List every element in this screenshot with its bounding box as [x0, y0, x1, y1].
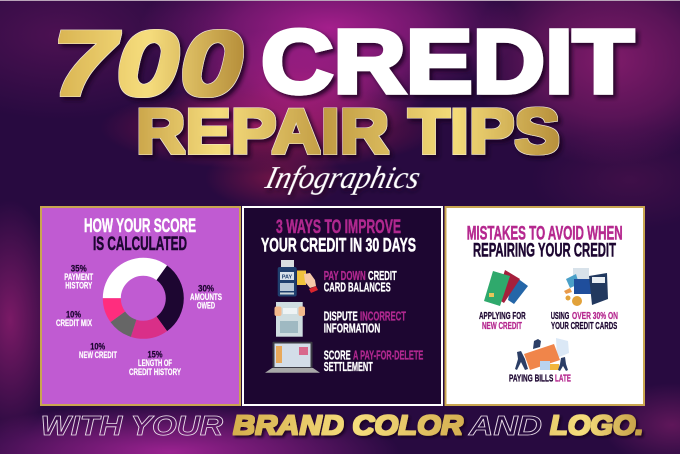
label: 10% new credit: NEW CREDIT [79, 350, 117, 360]
tagline [40, 410, 644, 441]
label: 35% payment history: HISTORY [65, 280, 92, 290]
icon: payment terminal and card [278, 260, 318, 296]
text: using over 30% on your credit cards [551, 310, 618, 332]
heading: your credit in 30 days: YOUR CREDIT IN 30 DAYS [261, 236, 416, 257]
text: score a pay-for-delete settlement: A PAY-FOR-DELETE [353, 348, 423, 362]
title: REPAIR TIPS: REPAIR TIPS [136, 97, 560, 167]
label: 30% amounts owed: 30% [198, 284, 214, 294]
text: using over 30% on your credit cards: USING [551, 310, 569, 322]
icon: payment terminal and card: PAY [282, 274, 293, 280]
text: pay down credit card balances: PAY DOWN [324, 269, 366, 283]
label: 15% length of credit history: CREDIT HISTORY [129, 367, 181, 377]
text: dispute incorrect information: INCORRECT [360, 309, 406, 323]
text: pay down credit card balances [324, 269, 397, 295]
title: CREDIT: CREDIT [261, 12, 634, 112]
label: 10% credit mix: CREDIT MIX [56, 318, 92, 328]
text: pay down credit card balances: CREDIT [368, 269, 397, 283]
heading: 3 ways to improve: 3 WAYS TO IMPROVE [276, 217, 401, 238]
text: paying bills late: PAYING BILLS [509, 373, 553, 385]
donut chart [112, 267, 175, 330]
icon: people with oversized bill [515, 338, 569, 371]
text: score a pay-for-delete settlement [324, 348, 423, 374]
text: dispute incorrect information: INFORMATION [324, 321, 380, 335]
panel: 3 ways to improve [243, 207, 442, 405]
label: 15% length of credit history: 15% [148, 350, 162, 360]
text: applying for new credit: NEW CREDIT [482, 320, 522, 332]
label: 30% amounts owed: OWED [197, 300, 215, 310]
subtitle: Infographics: Infographics [261, 160, 424, 196]
panel: how your score is calculated [41, 207, 240, 405]
tagline: LOGO. [550, 410, 644, 440]
tagline: WITH YOUR [40, 410, 224, 441]
tagline: BRAND COLOR [233, 410, 464, 440]
icon: calculator and cards [564, 268, 608, 306]
label: 15% length of credit history [129, 350, 181, 377]
label: 35% payment history: 35% [71, 264, 87, 274]
text: applying for new credit: APPLYING FOR [479, 310, 526, 322]
tagline: AND [468, 410, 542, 441]
label: 15% length of credit history: LENGTH OF [138, 358, 172, 368]
text: applying for new credit [479, 310, 526, 332]
text: score a pay-for-delete settlement: SCORE [324, 348, 351, 362]
icon: credit cards [484, 270, 528, 306]
icon: laptop [265, 342, 320, 373]
heading: is calculated: IS CALCULATED [93, 234, 187, 255]
label: 30% amounts owed [190, 284, 222, 310]
label: 10% new credit [79, 342, 117, 360]
text: paying bills late: LATE [555, 373, 571, 385]
text: using over 30% on your credit cards: OVER 30% ON [572, 310, 618, 322]
heading: how your score: HOW YOUR SCORE [84, 216, 196, 237]
panel: mistakes to avoid [446, 207, 644, 405]
title: 700: 700 [52, 13, 243, 115]
label: 35% payment history [64, 264, 94, 290]
text: dispute incorrect information [324, 309, 406, 335]
icon: document held by hands [274, 302, 305, 337]
text: pay down credit card balances: CARD BALANCES [324, 281, 391, 295]
text: score a pay-for-delete settlement: SETTLEMENT [324, 360, 373, 374]
label: 30% amounts owed: AMOUNTS [190, 292, 222, 302]
label: 10% credit mix: 10% [66, 310, 81, 320]
label: 10% new credit: 10% [90, 342, 105, 352]
text: using over 30% on your credit cards: YOUR CREDIT CARDS [551, 320, 617, 332]
label: 35% payment history: PAYMENT [64, 272, 94, 282]
text: dispute incorrect information: DISPUTE [324, 309, 358, 323]
label: 10% credit mix [56, 310, 92, 328]
